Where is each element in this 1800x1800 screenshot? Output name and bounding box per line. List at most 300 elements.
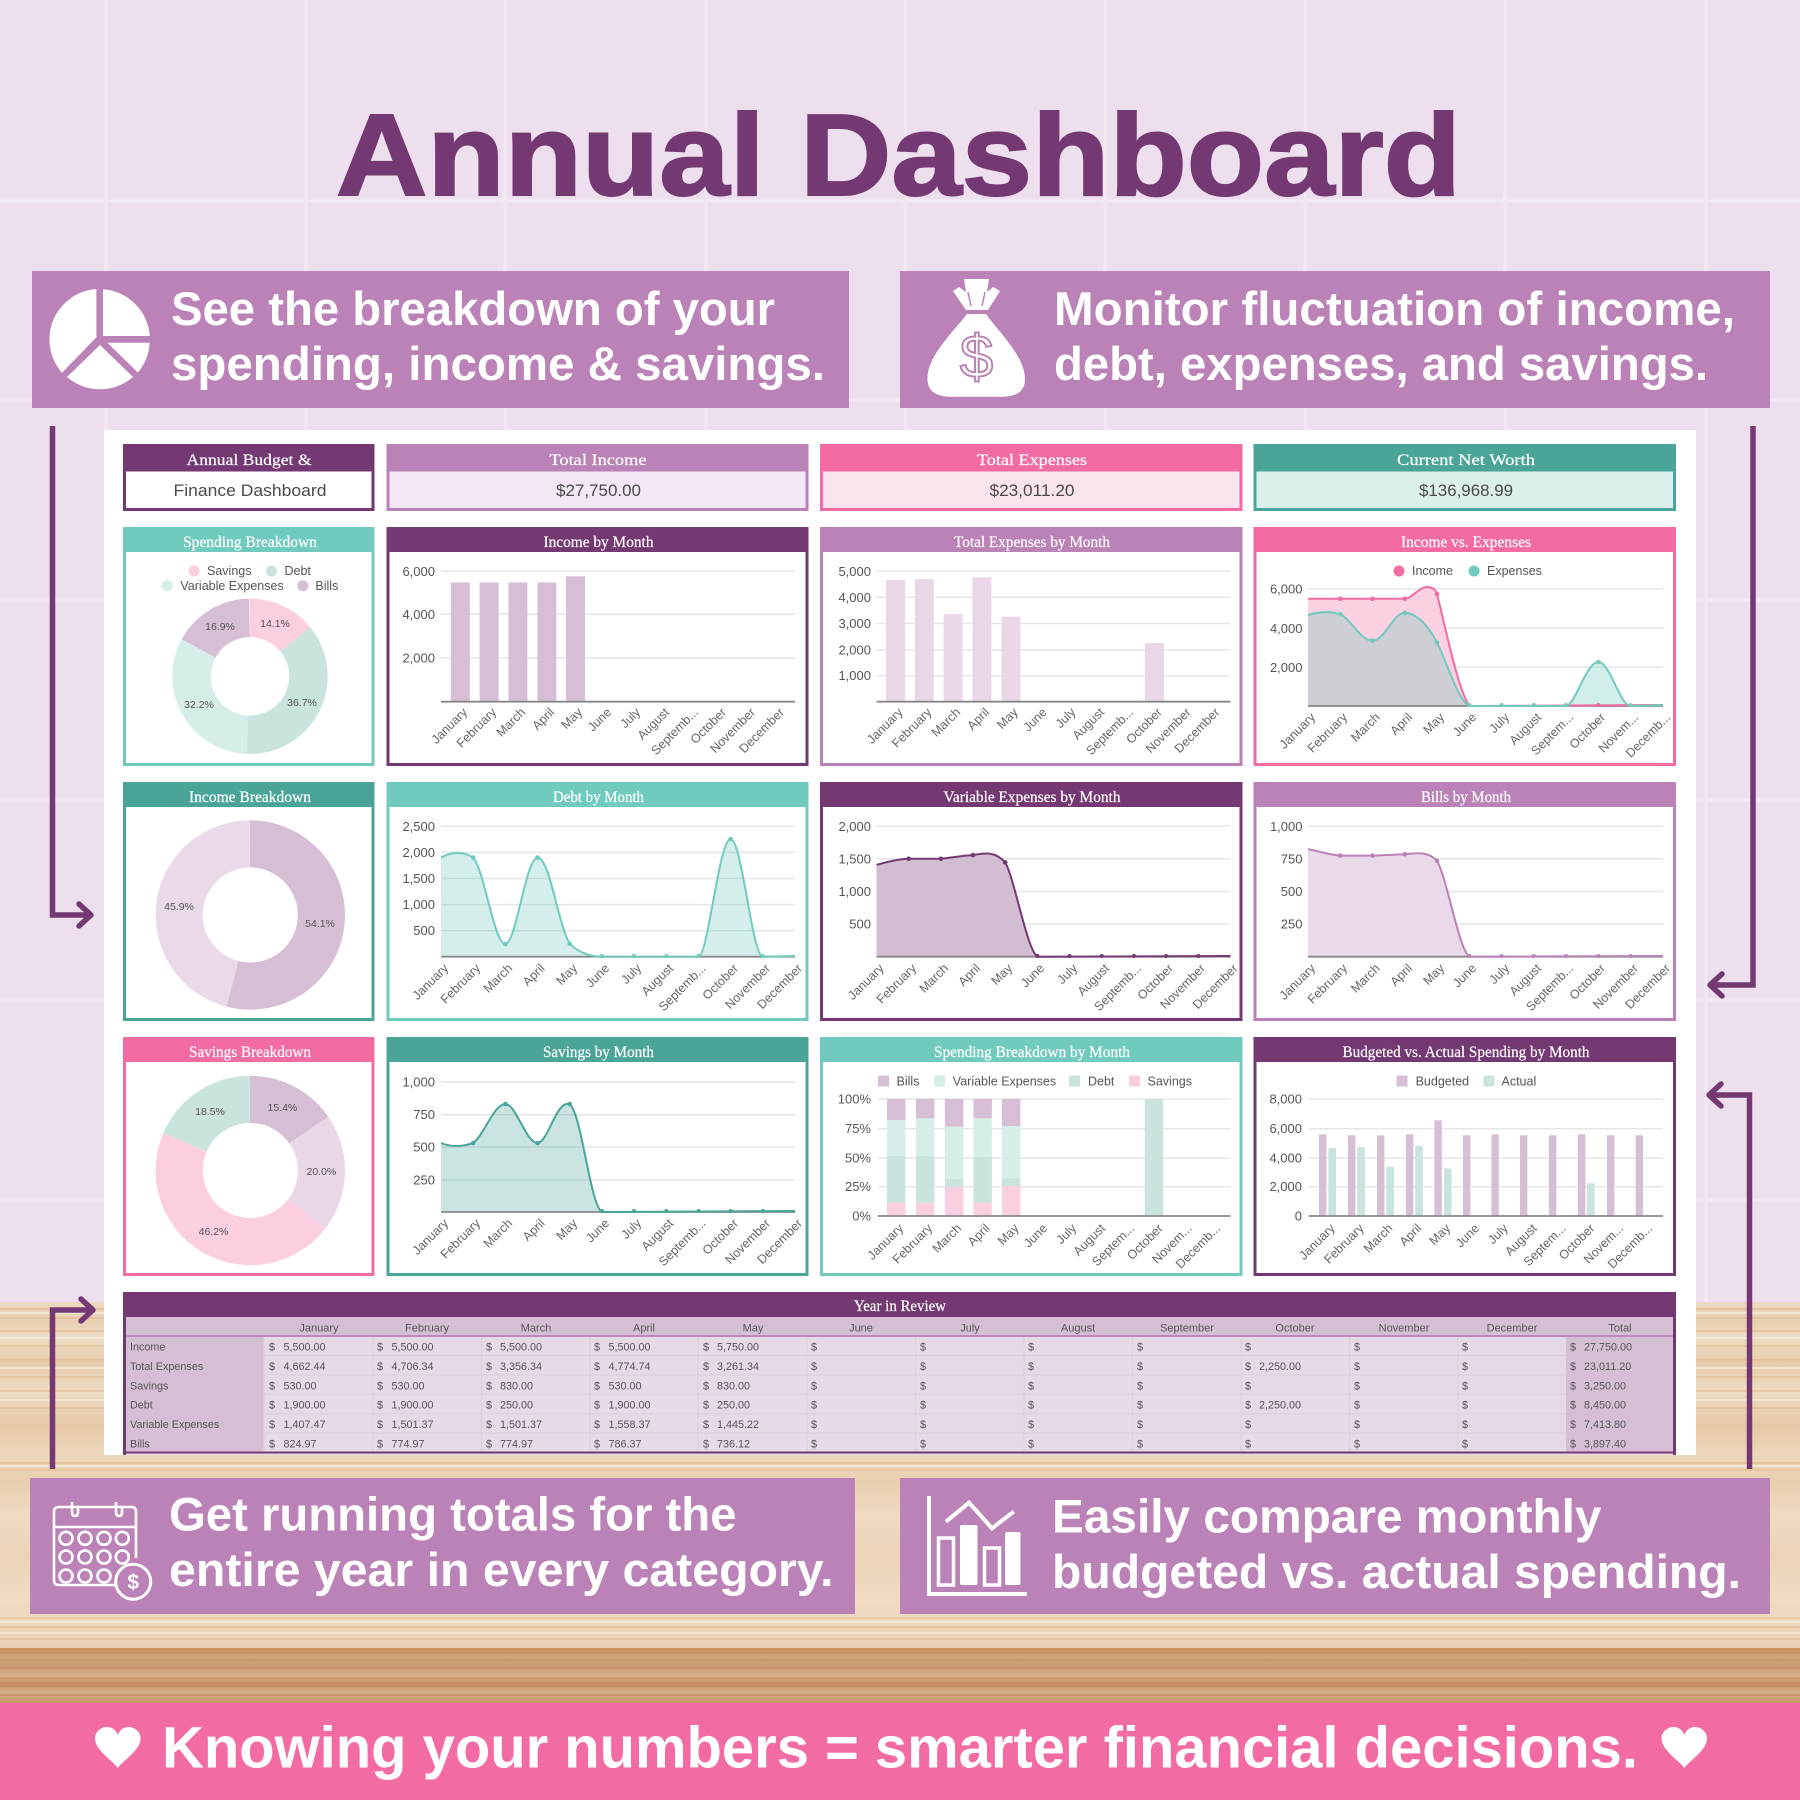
row: Total Expenses: 4,774.74 (608, 1361, 651, 1373)
area chart: Novem... (1596, 710, 1641, 755)
area chart: 1,500 (838, 852, 871, 866)
row: Bills: $ (1570, 1438, 1576, 1450)
bar chart: Septemb... (648, 705, 701, 758)
banner: running totals (30, 1478, 855, 1614)
row: Debt: $ (1570, 1400, 1576, 1412)
area chart: August (639, 961, 676, 999)
banner: breakdown (32, 271, 849, 408)
panel: Spending Breakdown by Month (820, 1037, 1242, 1276)
area chart: March (481, 1216, 515, 1251)
donut labels: 18.5% (195, 1106, 225, 1118)
bar chart: March (494, 705, 528, 740)
stacked bar chart: 25% (845, 1179, 871, 1194)
title: Annual Dashboard (336, 90, 1461, 220)
row: Debt: 1,900.00 (608, 1400, 651, 1412)
bar chart: June (1021, 705, 1050, 734)
area chart: January (410, 961, 452, 1003)
row: Income: $ (811, 1342, 817, 1354)
panel: Income by Month: Income by Month (544, 534, 654, 551)
row: Income: 5,500.00 (608, 1342, 651, 1354)
area chart: July (1486, 710, 1513, 736)
bar chart: July (617, 705, 644, 731)
grouped bar chart: 4,000 (1269, 1150, 1302, 1166)
row: Bills: $ (1354, 1438, 1360, 1450)
bar chart: December (736, 705, 787, 756)
row: Debt: Debt (130, 1400, 153, 1412)
area chart: December (754, 961, 805, 1012)
card: Annual Budget title: Annual Budget & (186, 452, 312, 469)
panel: Budgeted vs. Actual Spending by Month: Budgeted vs. Actual Spending by Month (1342, 1044, 1590, 1061)
row: Bills: $ (1245, 1438, 1251, 1450)
area chart: 500 (413, 1140, 435, 1154)
panel: Spending Breakdown by Month: Spending Breakdown by Month (934, 1044, 1130, 1061)
row: Debt: 8,450.00 (1584, 1400, 1626, 1412)
footer text: Knowing your numbers = smarter financial decisions. (162, 1716, 1638, 1781)
area chart: January (845, 961, 887, 1003)
row: Bills: $ (811, 1438, 817, 1450)
stacked bar chart: May (995, 1221, 1022, 1248)
row: Total Expenses: $ (1570, 1361, 1576, 1373)
row: Income: $ (377, 1342, 383, 1354)
row: Savings: 830.00 (500, 1380, 533, 1392)
table: Year in Review: Year in Review (854, 1298, 946, 1315)
stacked bar chart: Novem... (1149, 1221, 1195, 1266)
icon: heart right (1662, 1727, 1707, 1768)
grouped bar chart: March (1361, 1221, 1395, 1256)
panel: Bills by Month (1254, 782, 1676, 1021)
row: Variable Expenses: $ (920, 1419, 926, 1431)
banner text (1052, 1490, 1741, 1598)
area chart: June (1450, 710, 1479, 739)
area chart: May (1421, 710, 1448, 737)
row: Variable Expenses: $ (1570, 1419, 1576, 1431)
table months: April (633, 1322, 655, 1334)
card: Total Income: $27,750.00 (556, 481, 641, 500)
grouped bar chart: August (1502, 1221, 1540, 1259)
panel: Budgeted vs. Actual Spending by Month (1254, 1037, 1676, 1276)
grouped bar chart: July (1485, 1221, 1511, 1247)
row: Debt: 250.00 (500, 1400, 533, 1412)
bar chart: July (1053, 705, 1079, 731)
area chart: Septem... (1528, 710, 1576, 758)
banner text (171, 282, 825, 390)
bar chart: November (707, 705, 758, 756)
row: Total Expenses: 3,261.34 (717, 1361, 759, 1373)
panel: Spending Breakdown (123, 527, 374, 766)
donut labels: 45.9% (164, 901, 194, 913)
row: Bills: $ (594, 1438, 600, 1450)
bar chart: 4,000 (402, 607, 435, 622)
grouped bar chart: April (1397, 1221, 1424, 1249)
area chart: November (1590, 961, 1641, 1012)
row: Bills: 736.12 (717, 1438, 750, 1450)
banner text: Monitor fluctuation of income, (1054, 282, 1735, 335)
row: Income: $ (1462, 1342, 1468, 1354)
row: Total Expenses: $ (486, 1361, 492, 1373)
row: Debt: $ (920, 1400, 926, 1412)
bar chart (838, 564, 1230, 758)
area chart: May (554, 961, 581, 988)
row: Bills: $ (703, 1438, 709, 1450)
legend: Savings (1148, 1074, 1192, 1088)
row: Variable Expenses: $ (703, 1419, 709, 1431)
panel: Savings by Month: Savings by Month (543, 1044, 654, 1061)
area chart: 750 (413, 1107, 435, 1122)
table months: October (1275, 1322, 1315, 1334)
row: Total Expenses: $ (269, 1361, 275, 1373)
row: Savings: $ (269, 1380, 275, 1392)
row: Total Expenses: 23,011.20 (1584, 1361, 1631, 1373)
row: Bills: $ (1028, 1438, 1034, 1450)
donut labels (184, 618, 317, 711)
row: Savings: 830.00 (717, 1380, 750, 1392)
bar chart: 1,000 (838, 668, 871, 683)
row: Variable Expenses: $ (1462, 1419, 1468, 1431)
area chart: 500 (849, 916, 871, 932)
arrow: left top (52, 426, 91, 926)
row: Debt: $ (377, 1400, 383, 1412)
row: Variable Expenses: 1,445.22 (717, 1419, 759, 1431)
row: Total Expenses: $ (920, 1361, 926, 1373)
legend: Bills (315, 579, 338, 593)
row: Debt: 2,250.00 (1259, 1400, 1301, 1412)
row: Debt: 250.00 (717, 1400, 750, 1412)
table months: January (299, 1322, 339, 1334)
row: Savings: $ (1462, 1380, 1468, 1392)
row: Total Expenses: $ (1137, 1361, 1143, 1373)
row: Savings: 530.00 (608, 1380, 642, 1392)
area chart: Septemb... (656, 1216, 709, 1269)
area chart: April (1388, 710, 1415, 738)
donut labels: 54.1% (305, 918, 335, 930)
row: Total Expenses: 4,706.34 (392, 1361, 434, 1373)
row: Bills: 786.37 (608, 1438, 642, 1450)
row: Savings: $ (811, 1380, 817, 1392)
row: Income: $ (594, 1342, 600, 1354)
area chart: December (1190, 961, 1241, 1012)
bar chart: October (688, 705, 729, 747)
banner text: Easily compare monthly (1052, 1490, 1602, 1543)
card: Annual Budget title: Finance Dashboard (174, 481, 326, 500)
table months: February (405, 1322, 450, 1334)
row: Total Expenses: $ (377, 1361, 383, 1373)
table months: Total (1608, 1322, 1632, 1334)
grouped bar chart: Septem... (1521, 1221, 1569, 1269)
area chart (402, 819, 805, 1014)
area chart: 2,000 (838, 819, 871, 834)
stacked bar chart: 100% (838, 1092, 871, 1106)
row: Variable Expenses: $ (1137, 1419, 1143, 1431)
area chart: June (583, 961, 612, 990)
panel: Debt by Month: Debt by Month (553, 789, 644, 806)
stacked bar chart: February (890, 1221, 936, 1266)
area chart: 750 (1281, 852, 1302, 866)
banner text: Get running totals for the (169, 1488, 736, 1541)
row: Total Expenses: 4,662.44 (284, 1361, 326, 1373)
row: Bills: 824.97 (284, 1438, 317, 1450)
legend (1394, 564, 1542, 578)
area chart: 1,000 (402, 897, 435, 912)
table months: March (521, 1322, 551, 1334)
area chart: October (1135, 961, 1176, 1003)
card: Current Net Worth: $136,968.99 (1419, 481, 1513, 500)
legend: Bills (896, 1074, 919, 1088)
area chart: December (1622, 961, 1673, 1012)
row: Savings: $ (377, 1380, 383, 1392)
area chart: 6,000 (1270, 582, 1302, 596)
panel: Savings Breakdown: Savings Breakdown (189, 1044, 311, 1061)
table shading (123, 1317, 1676, 1454)
area chart: 1,000 (1270, 819, 1302, 834)
panel: Spending Breakdown: Spending Breakdown (183, 534, 317, 551)
area chart: 1,500 (402, 871, 435, 886)
panel: Total Expenses by Month (820, 527, 1242, 766)
area chart: March (1348, 961, 1383, 996)
table months: June (849, 1322, 873, 1334)
stacked bar chart: 75% (845, 1121, 871, 1136)
table months: July (960, 1322, 980, 1334)
row: Debt: $ (1028, 1400, 1034, 1412)
area chart: May (989, 961, 1016, 988)
row: Savings: $ (703, 1380, 709, 1392)
area chart: June (1018, 961, 1047, 990)
area chart: February (1305, 961, 1351, 1006)
legend: Budgeted (1416, 1074, 1469, 1088)
area chart (1270, 582, 1673, 760)
icon: money bag (927, 279, 1025, 397)
donut labels: 36.7% (287, 697, 317, 709)
table months: November (1379, 1322, 1430, 1334)
table: Year in Review (123, 1292, 1676, 1455)
table months: December (1487, 1322, 1538, 1334)
banner text (169, 1488, 834, 1596)
bar chart: 6,000 (402, 564, 435, 579)
row: Debt: $ (269, 1400, 275, 1412)
row: Variable Expenses: $ (594, 1419, 600, 1431)
row: Income: $ (1245, 1342, 1251, 1354)
bar chart: December (1172, 705, 1222, 756)
row: Variable Expenses: $ (1354, 1419, 1360, 1431)
grouped bar chart: February (1321, 1221, 1367, 1266)
banner text: budgeted vs. actual spending. (1052, 1545, 1741, 1598)
icon: chart (929, 1496, 1027, 1594)
area chart: 1,000 (838, 884, 871, 899)
card: Total Income: Total Income (550, 452, 646, 469)
area chart: 2,000 (402, 845, 435, 860)
row: Savings: $ (1028, 1380, 1034, 1392)
panel: Income Breakdown (123, 782, 374, 1021)
stacked bar chart: August (1071, 1221, 1108, 1259)
panel: Income Breakdown: Income Breakdown (189, 789, 311, 806)
area chart: Decemb... (1623, 710, 1673, 760)
area chart: June (583, 1216, 612, 1245)
area chart: 250 (413, 1172, 435, 1188)
bar chart: January (429, 705, 471, 747)
row: Income: 5,750.00 (717, 1342, 759, 1354)
row: Income: $ (1354, 1342, 1360, 1354)
legend: Expenses (1487, 564, 1542, 578)
dashboard sheet (104, 430, 1696, 1455)
stacked bar chart: October (1124, 1221, 1166, 1263)
banner text: See the breakdown of your (171, 282, 775, 335)
bar chart: 2,000 (402, 650, 435, 666)
bar chart: March (929, 705, 963, 740)
row: Savings: 3,250.00 (1584, 1380, 1626, 1392)
table months: September (1160, 1322, 1214, 1334)
row: Bills: $ (486, 1438, 492, 1450)
panel: Savings by Month (386, 1037, 808, 1276)
bar chart: Septemb... (1083, 705, 1136, 758)
area chart: January (410, 1216, 452, 1258)
area chart: May (554, 1216, 581, 1243)
row: Total Expenses: $ (1462, 1361, 1468, 1373)
table months: August (1061, 1322, 1095, 1334)
area chart: 500 (413, 923, 435, 938)
donut labels (195, 1102, 336, 1238)
row: Variable Expenses: $ (811, 1419, 817, 1431)
bar chart: May (559, 705, 586, 732)
icon: heart left (95, 1727, 141, 1768)
bar chart: February (454, 705, 500, 750)
row: Debt: $ (1354, 1400, 1360, 1412)
area chart: April (1388, 961, 1415, 989)
bar chart: October (1123, 705, 1165, 747)
row: Variable Expenses: 1,558.37 (608, 1419, 651, 1431)
arrow: right top (1710, 426, 1753, 996)
area chart: 2,000 (1270, 660, 1302, 675)
area chart: October (1567, 961, 1608, 1003)
donut labels: 32.2% (184, 699, 214, 711)
bar chart: 2,000 (838, 642, 871, 658)
card: Current Net Worth: Current Net Worth (1397, 452, 1535, 469)
bar chart (402, 564, 795, 758)
stacked bar chart: 50% (845, 1150, 871, 1166)
area chart: July (618, 961, 645, 987)
stacked bar chart: Septem... (1089, 1221, 1137, 1269)
stacked bar chart: Decemb... (1173, 1221, 1223, 1271)
area chart: Septemb... (656, 961, 709, 1014)
area chart: Septemb... (1091, 961, 1144, 1014)
donut chart (179, 1099, 321, 1242)
area chart: February (874, 961, 920, 1006)
arrow: bottom left (52, 1299, 93, 1469)
row: Variable Expenses: $ (1028, 1419, 1034, 1431)
panel: Total Expenses by Month: Total Expenses by Month (954, 534, 1110, 551)
area chart: December (754, 1216, 805, 1267)
panel: Bills by Month: Bills by Month (1421, 789, 1511, 806)
icon: calendar with dollar: $ (127, 1571, 139, 1594)
row: Bills: $ (269, 1438, 275, 1450)
row: Savings: $ (594, 1380, 600, 1392)
grouped bar chart: June (1453, 1221, 1482, 1250)
row: Total Expenses: 3,356.34 (500, 1361, 542, 1373)
area chart (1270, 819, 1673, 1014)
area chart: October (1567, 710, 1608, 752)
bar chart: June (585, 705, 614, 734)
row: Bills: $ (920, 1438, 926, 1450)
area chart: November (1157, 961, 1208, 1012)
row: Income: Income (130, 1342, 165, 1354)
grouped bar chart: Novem... (1581, 1221, 1626, 1266)
area chart: July (1054, 961, 1081, 987)
area chart: 4,000 (1270, 621, 1302, 636)
stacked bar chart: January (865, 1221, 907, 1263)
grouped bar chart: 6,000 (1269, 1121, 1302, 1136)
banner text: debt, expenses, and savings. (1054, 337, 1708, 390)
panel: Savings Breakdown (123, 1037, 374, 1276)
stacked bar chart: July (1053, 1221, 1080, 1247)
row: Total Expenses: $ (1245, 1361, 1251, 1373)
row: Debt: 1,900.00 (392, 1400, 434, 1412)
panel: Income vs. Expenses (1254, 527, 1676, 766)
bar chart: November (1143, 705, 1194, 756)
area chart: February (438, 1216, 484, 1261)
area chart: 1,000 (402, 1074, 435, 1090)
row: Variable Expenses: 1,407.47 (284, 1419, 326, 1431)
row: Savings: Savings (130, 1380, 169, 1392)
row: Income: $ (1028, 1342, 1034, 1354)
row: Debt: 1,900.00 (284, 1400, 326, 1412)
legend (878, 1074, 1192, 1088)
row: Bills: $ (377, 1438, 383, 1450)
row: Savings: 530.00 (392, 1380, 425, 1392)
donut labels: 14.1% (260, 618, 290, 630)
panel: Variable Expenses by Month: Variable Expenses by Month (944, 789, 1120, 806)
legend: Debt (1088, 1074, 1115, 1088)
legend (1396, 1074, 1536, 1088)
row: Bills: 774.97 (392, 1438, 425, 1450)
area chart: March (1348, 710, 1383, 745)
table months (299, 1322, 1632, 1334)
row: Savings: 530.00 (284, 1380, 317, 1392)
area chart: August (1507, 961, 1544, 999)
grouped bar chart: January (1296, 1221, 1338, 1263)
row: Income: $ (486, 1342, 492, 1354)
bar chart: 4,000 (838, 590, 871, 605)
row: Variable Expenses: $ (269, 1419, 275, 1431)
bar chart: May (994, 705, 1021, 732)
legend: Variable Expenses (953, 1074, 1056, 1088)
area chart: August (1507, 710, 1544, 748)
icon: money bag: $ (960, 323, 993, 390)
row: Debt: $ (1462, 1400, 1468, 1412)
banner text: spending, income & savings. (171, 337, 825, 390)
stacked bar chart: June (1021, 1221, 1050, 1250)
row: Bills: $ (1137, 1438, 1143, 1450)
row: Income: 5,500.00 (284, 1342, 326, 1354)
row: Variable Expenses: $ (377, 1419, 383, 1431)
background: wood table (0, 1302, 1800, 1703)
grouped bar chart: May (1427, 1221, 1454, 1248)
row: Debt: $ (1245, 1400, 1251, 1412)
row: Savings: $ (1137, 1380, 1143, 1392)
bar chart: August (635, 705, 672, 743)
area chart: November (722, 1216, 773, 1267)
row: Debt: $ (486, 1400, 492, 1412)
row: Total Expenses: $ (1028, 1361, 1034, 1373)
row: Variable Expenses: 1,501.37 (500, 1419, 542, 1431)
legend (162, 564, 338, 593)
area chart: August (639, 1216, 676, 1254)
stacked bar chart (838, 1092, 1231, 1271)
card: Total Income (386, 444, 808, 511)
legend: Actual (1502, 1074, 1536, 1088)
legend: Debt (284, 564, 311, 578)
row: Income: $ (920, 1342, 926, 1354)
donut chart (179, 844, 321, 986)
row: Bills: 774.97 (500, 1438, 533, 1450)
icon: pie chart (49, 289, 150, 389)
